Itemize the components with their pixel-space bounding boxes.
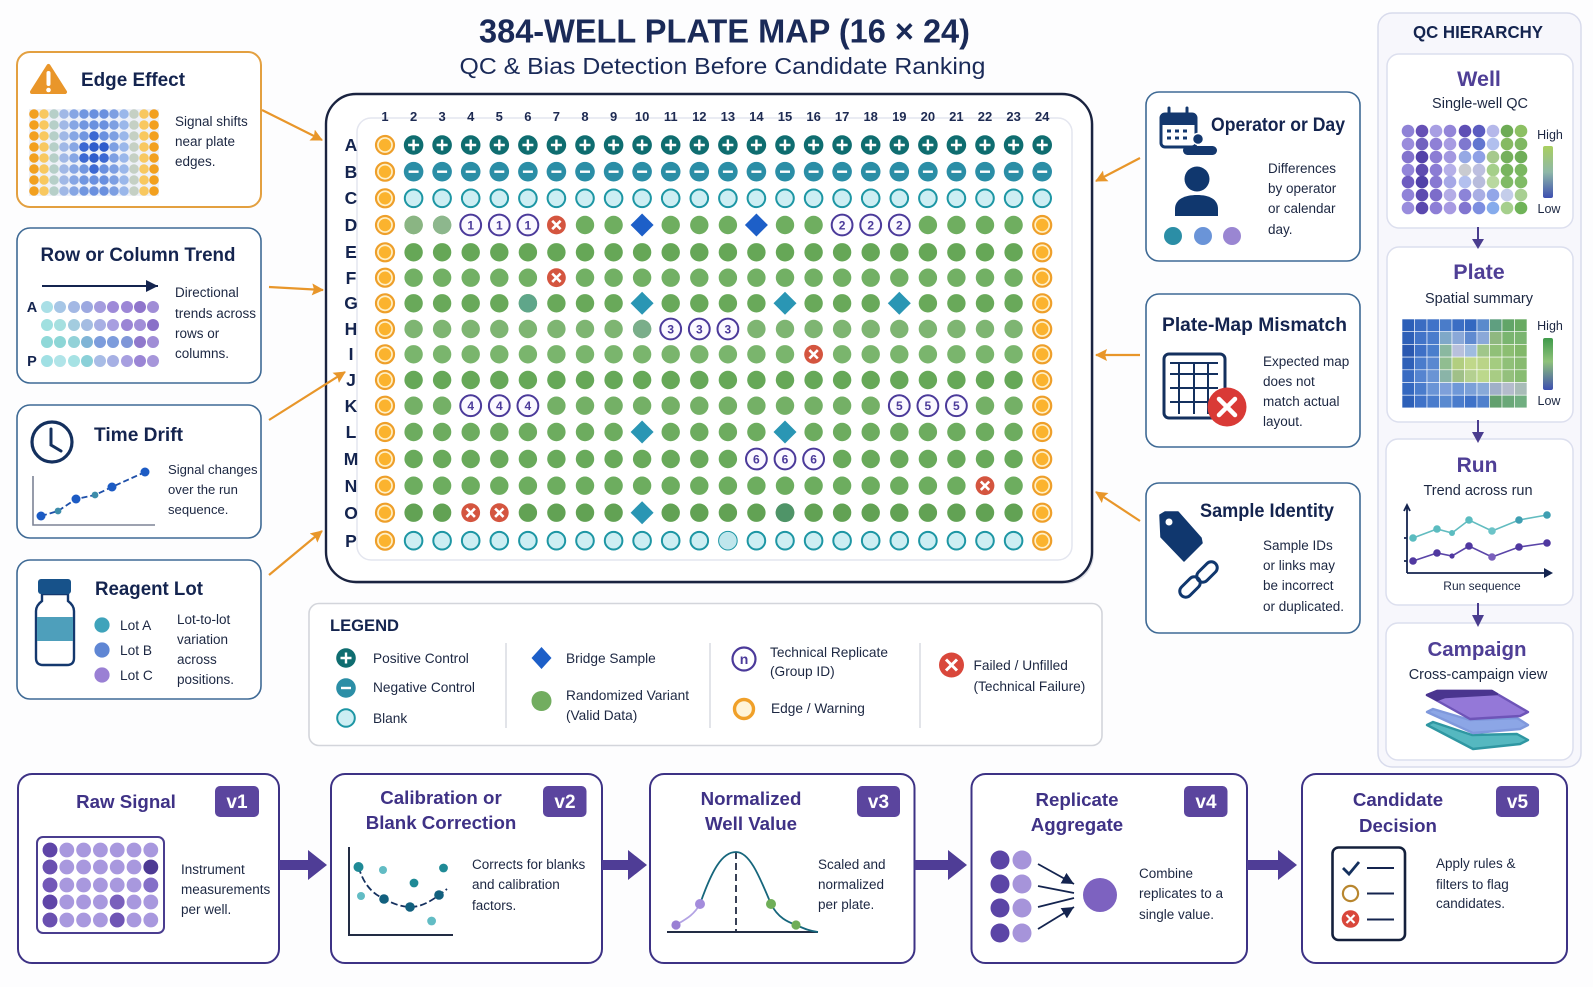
description: does not [1263,374,1315,389]
row labels: M [344,449,358,469]
row labels: O [344,503,358,523]
lot key: Lot B [120,643,152,658]
description: Corrects for blanks [472,857,586,872]
column labels: 19 [892,109,907,124]
column labels: 3 [438,109,446,124]
replicate group numbers: 2 [839,218,846,232]
arrow: v1 to v2 [279,850,327,880]
panel: plate map [326,94,1094,584]
panel: legend [309,604,1102,746]
heading: LEGEND [330,616,399,635]
panel: plate-map mismatch [1146,294,1360,447]
badge v5: v5 [1507,792,1528,813]
card: run: Trend across run [1423,483,1533,499]
column labels: 13 [721,109,735,124]
column labels: 9 [610,109,617,124]
badge v1: v1 [226,792,248,813]
legend: failed: (Technical Failure) [974,679,1085,694]
column labels: 6 [524,109,532,124]
row labels: A [345,135,358,155]
description: near plate [175,134,235,149]
description: Signal shifts [175,114,248,129]
replicate group numbers: 6 [753,452,760,466]
badge v1 [215,786,259,817]
column labels: 15 [778,109,792,124]
legend: failed [939,652,1085,694]
description: Differences [1268,161,1336,176]
legend: replicate and edge: (Group ID) [770,664,835,679]
column labels: 22 [978,109,992,124]
legend: samples: (Valid Data) [566,708,637,723]
replicate group numbers: 5 [896,399,903,413]
row labels: K [345,396,358,416]
column labels: 23 [1006,109,1021,124]
panel: time drift [17,405,261,538]
column labels: 17 [835,109,849,124]
run line chart: Run sequence [1443,579,1521,593]
arrow: v3 to v4 [914,850,967,880]
arrows: right cards to plate [1096,158,1140,521]
description: be incorrect [1263,578,1334,593]
failed wells [461,215,995,523]
replicate group numbers: 3 [725,322,732,336]
icon: tag [1160,512,1202,561]
description: over the run [168,482,238,497]
title: 384-WELL PLATE MAP (16 × 24) [479,14,970,50]
column labels: 14 [749,109,764,124]
heading: Well Value [705,813,797,834]
panel: sample identity [1146,483,1360,633]
badge v3 [857,786,900,817]
heading: QC HIERARCHY [1413,22,1543,42]
replicate group numbers: 6 [782,452,789,466]
card: plate [1387,247,1573,422]
description: filters to flag [1436,877,1509,892]
card: plate: Plate [1453,260,1505,284]
description: per plate. [818,897,874,912]
card: well: Single-well QC [1432,96,1528,112]
well plate icon [37,837,164,933]
arrow: v4 to v5 [1247,850,1297,880]
column labels: 8 [581,109,589,124]
row labels: N [345,476,357,496]
well colour scale [1537,128,1563,216]
card: well [1387,54,1573,228]
heading: Time Drift [94,424,183,446]
column labels: 7 [553,109,560,124]
plate colour scale: Low [1538,394,1561,408]
bridge samples [631,214,911,524]
panel: operator or day [1146,92,1360,261]
row labels: B [345,162,357,182]
arrow: v2 to v3 [602,850,647,880]
icon: grid with error [1164,354,1246,426]
arrows: left cards to plate [262,110,345,575]
column labels: 11 [664,109,678,124]
description: variation [177,632,228,647]
heading: Calibration or [380,787,502,808]
replicate group numbers: 1 [467,218,474,232]
trend dots: P [27,354,37,370]
well colour scale: High [1537,128,1563,142]
run line chart [1404,505,1553,593]
icon: calendar with badge [1161,108,1217,155]
replicate group numbers: 1 [496,218,503,232]
row labels: E [345,242,357,262]
card: campaign [1386,623,1573,760]
arrow: plate to run [1472,420,1484,443]
row labels: F [346,268,357,288]
panel: row or column trend [17,228,261,383]
heading: Reagent Lot [95,578,203,600]
heading: Blank Correction [366,812,516,833]
card: well: Well [1457,67,1501,91]
well colour scale: Low [1538,202,1561,216]
panel: edge effect [17,52,261,207]
description: or links may [1263,558,1335,573]
replicate group numbers: 4 [525,399,532,413]
heading: Raw Signal [76,791,176,812]
replicate group numbers: 5 [953,399,960,413]
panel: v4 replicate aggregate [972,774,1247,963]
badge v2 [543,786,586,817]
heading: Sample Identity [1200,500,1334,522]
heading: Edge Effect [81,69,185,91]
icon: vial [36,579,74,665]
description: Directional [175,285,239,300]
lot key [94,617,153,683]
description: layout. [1263,414,1303,429]
replicate dots to aggregate [990,850,1117,942]
lot key: Lot A [120,618,152,633]
legend: replicate and edge: Edge / Warning [771,701,865,716]
column labels: 18 [863,109,878,124]
column labels: 5 [496,109,503,124]
card: plate: Spatial summary [1425,291,1534,307]
column labels: 10 [635,109,649,124]
icon: operator [1175,166,1218,216]
subtitle: QC & Bias Detection Before Candidate Ranking [460,53,986,79]
plate heatmap [1402,319,1527,408]
technical replicate wells [460,215,967,469]
drift chart [33,468,155,525]
description: Expected map [1263,354,1349,369]
description: Apply rules & [1436,856,1516,871]
description: across [177,652,217,667]
row labels [344,135,358,551]
legend: controls: Negative Control [373,680,475,695]
legend: controls: Blank [373,711,407,726]
card: run: Run [1457,454,1497,477]
heading: Plate-Map Mismatch [1162,314,1347,336]
row labels: C [345,188,358,208]
arrow: run to campaign [1472,603,1484,627]
legend: failed: Failed / Unfilled [974,658,1068,673]
heading: Normalized [701,788,801,809]
description: normalized [818,877,884,892]
legend: controls: Positive Control [373,651,469,666]
legend: samples: Randomized Variant [566,688,689,703]
icon: clock [32,422,72,462]
icon: checklist [1332,848,1405,940]
badge v4 [1184,786,1228,817]
replicate group numbers: 5 [925,399,932,413]
panel: QC hierarchy [1378,13,1581,767]
panel: reagent lot [17,560,261,699]
edge heatmap [29,109,159,196]
replicate group numbers: 2 [896,218,903,232]
column labels: 4 [467,109,475,124]
row labels: P [345,531,357,551]
well dot grid [1402,125,1527,214]
heading: Candidate [1353,789,1443,810]
panel: v5 candidate decision [1302,774,1567,963]
column labels [381,109,1050,124]
description: factors. [472,898,516,913]
description: columns. [175,346,229,361]
column labels: 12 [692,109,707,124]
description: Sample IDs [1263,538,1333,553]
legend: samples [532,647,689,723]
card: campaign: Campaign [1427,638,1527,661]
description: measurements [181,882,271,897]
row labels: H [345,319,357,339]
description: positions. [177,672,234,687]
description: Signal changes [168,462,258,477]
description: Combine [1139,866,1193,881]
replicate group numbers: 4 [496,399,503,413]
description: Scaled and [818,857,886,872]
row labels: I [349,344,353,364]
trend dots [27,300,159,370]
description: by operator [1268,181,1337,196]
replicate group numbers: 4 [467,399,474,413]
replicate group numbers [467,218,960,466]
replicate group numbers: 6 [810,452,817,466]
column labels: 20 [921,109,935,124]
description: replicates to a [1139,886,1224,901]
panel: v2 calibration [331,774,602,963]
plate colour scale: High [1537,319,1563,333]
row labels: J [346,370,356,390]
legend: replicate and edge [732,645,888,718]
row labels: L [346,422,357,442]
bell curve [667,852,818,932]
trend dots: A [27,300,38,316]
column labels: 2 [410,109,417,124]
badge v3: v3 [868,792,889,813]
icon: direction arrow [42,285,158,287]
replicate group numbers: 2 [867,218,874,232]
description: day. [1268,222,1293,237]
plate colour scale [1537,319,1563,408]
description: candidates. [1436,896,1505,911]
description: or duplicated. [1263,599,1344,614]
column labels: 16 [806,109,821,124]
badge v5 [1496,786,1539,817]
heading: Aggregate [1031,814,1123,835]
replicate group numbers: 3 [667,322,674,336]
legend: samples: Bridge Sample [566,651,656,666]
description: trends across [175,306,256,321]
replicate group numbers: 3 [696,322,703,336]
legend: replicate and edge: Technical Replicate [770,645,888,660]
card: campaign: Cross-campaign view [1409,667,1548,683]
heading: Replicate [1035,789,1119,810]
row labels: D [345,215,357,235]
column labels: 24 [1035,109,1050,124]
day dots [1164,227,1241,245]
panel: v1 raw signal [18,774,279,963]
description: per well. [181,902,231,917]
description: or calendar [1268,201,1336,216]
icon: stacked layers [1427,691,1528,749]
description: sequence. [168,502,228,517]
description: Lot-to-lot [177,612,231,627]
icon: warning triangle [32,66,65,92]
card: run [1386,439,1573,605]
description: single value. [1139,907,1214,922]
description: and calibration [472,877,560,892]
lot key: Lot C [120,668,153,683]
icon: chain link [1177,559,1220,600]
badge v4: v4 [1195,792,1217,813]
legend: replicate and edge: n [740,651,748,667]
panel: v3 normalized well value [650,774,914,963]
column labels: 1 [381,109,389,124]
control and variant wells [376,135,1052,550]
heading: Decision [1359,815,1437,836]
description: match actual [1263,394,1340,409]
description: Instrument [181,862,245,877]
description: rows or [175,326,220,341]
legend: controls [336,648,475,727]
heading: Operator or Day [1211,114,1345,136]
column labels: 21 [949,109,964,124]
arrow: well to plate [1472,227,1484,249]
description: edges. [175,154,216,169]
calibration chart [349,847,453,935]
replicate group numbers: 1 [525,218,532,232]
row labels: G [344,293,358,313]
badge v2: v2 [554,792,576,813]
heading: Row or Column Trend [40,244,236,266]
